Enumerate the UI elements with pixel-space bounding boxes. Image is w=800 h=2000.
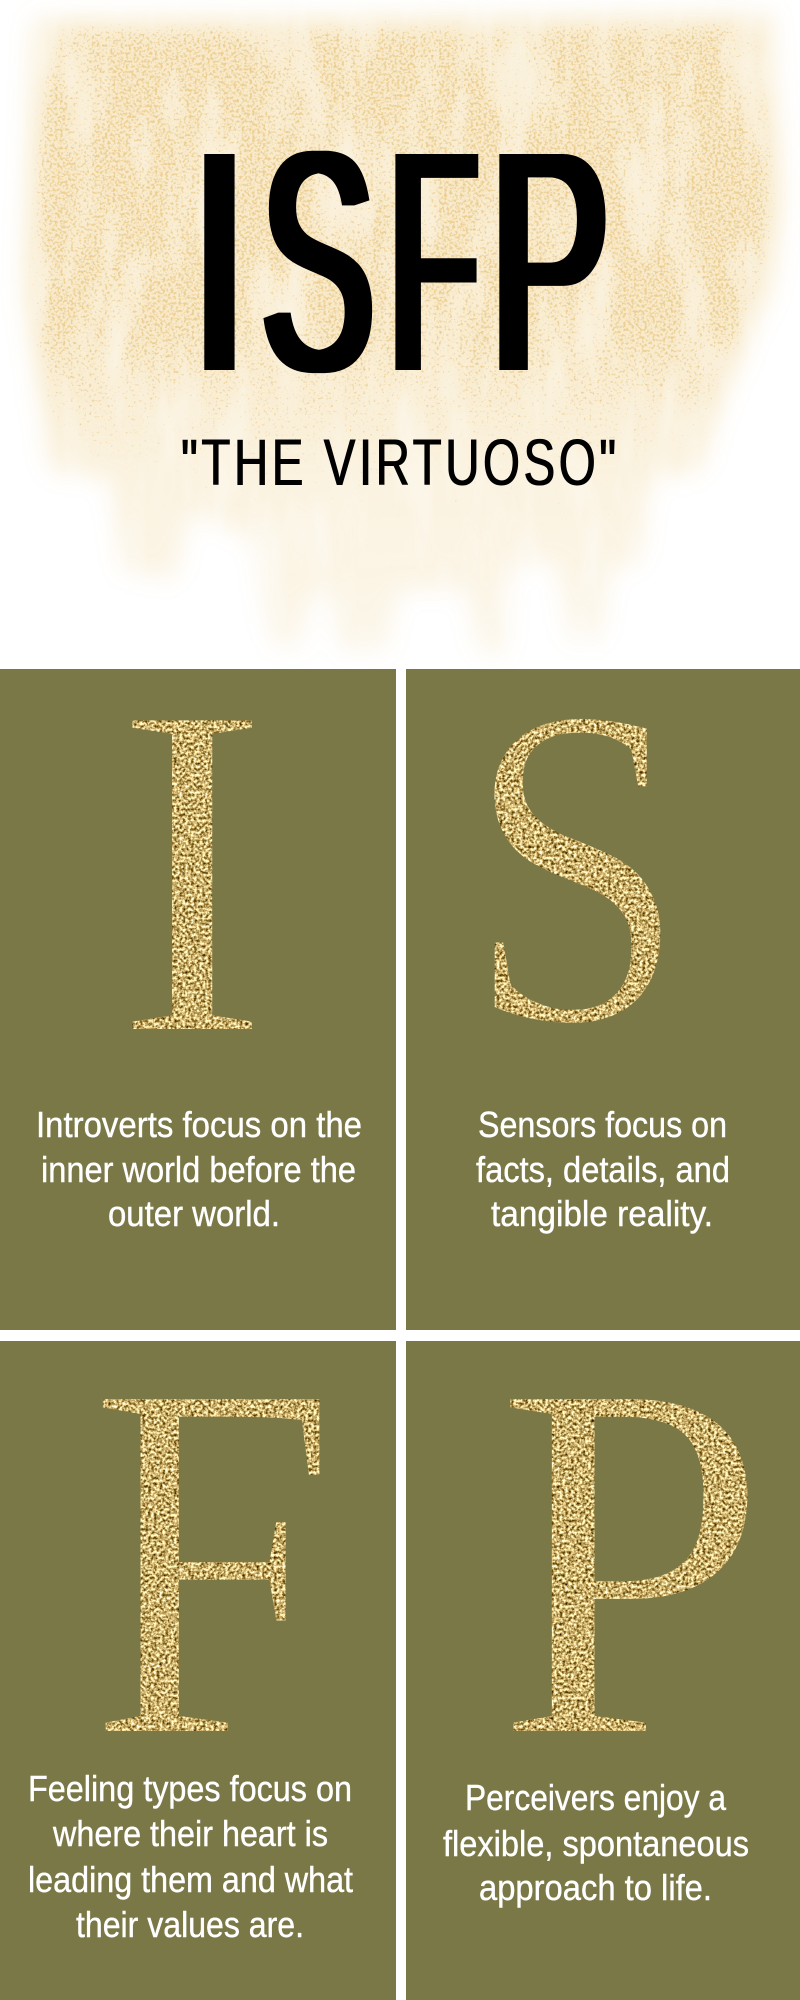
description: perceivers: Perceivers enjoy a xyxy=(465,1777,727,1818)
description: perceivers: flexible, spontaneous xyxy=(443,1823,749,1864)
description: feeling: leading them and what xyxy=(28,1859,353,1900)
panel: S sensor xyxy=(406,612,800,1330)
letter I: I xyxy=(114,605,270,1135)
letter S: S xyxy=(466,612,687,1122)
description: sensors: Sensors focus on xyxy=(478,1104,727,1145)
description: feeling: their values are. xyxy=(76,1904,304,1945)
title: ISFP xyxy=(192,86,609,438)
title: ISFP: I xyxy=(192,87,247,437)
title: ISFP: F xyxy=(390,86,478,437)
header: gold dust background xyxy=(25,15,780,655)
description: perceivers: approach to life. xyxy=(479,1867,712,1908)
title: ISFP: S xyxy=(262,87,374,437)
description: introverts xyxy=(36,1104,362,1234)
title: ISFP: P xyxy=(491,87,609,438)
description: feeling: Feeling types focus on xyxy=(28,1768,352,1809)
description: perceivers xyxy=(443,1777,749,1908)
description: sensors: facts, details, and xyxy=(476,1149,730,1190)
description: feeling xyxy=(28,1768,353,1945)
panel: I introvert xyxy=(0,605,396,1330)
description: introverts: Introverts focus on the xyxy=(36,1104,362,1145)
description: introverts: outer world. xyxy=(108,1193,280,1234)
subtitle: "THE VIRTUOSO" xyxy=(181,426,620,500)
description: sensors: tangible reality. xyxy=(491,1193,713,1234)
description: feeling: where their heart is xyxy=(52,1813,328,1854)
panel: P perceiver xyxy=(406,1276,800,2000)
panel: F feeling xyxy=(0,1276,396,2000)
description: introverts: inner world before the xyxy=(41,1149,356,1190)
description: sensors xyxy=(476,1104,730,1234)
letter P: P xyxy=(494,1276,769,1846)
letter F: F xyxy=(88,1276,338,1845)
